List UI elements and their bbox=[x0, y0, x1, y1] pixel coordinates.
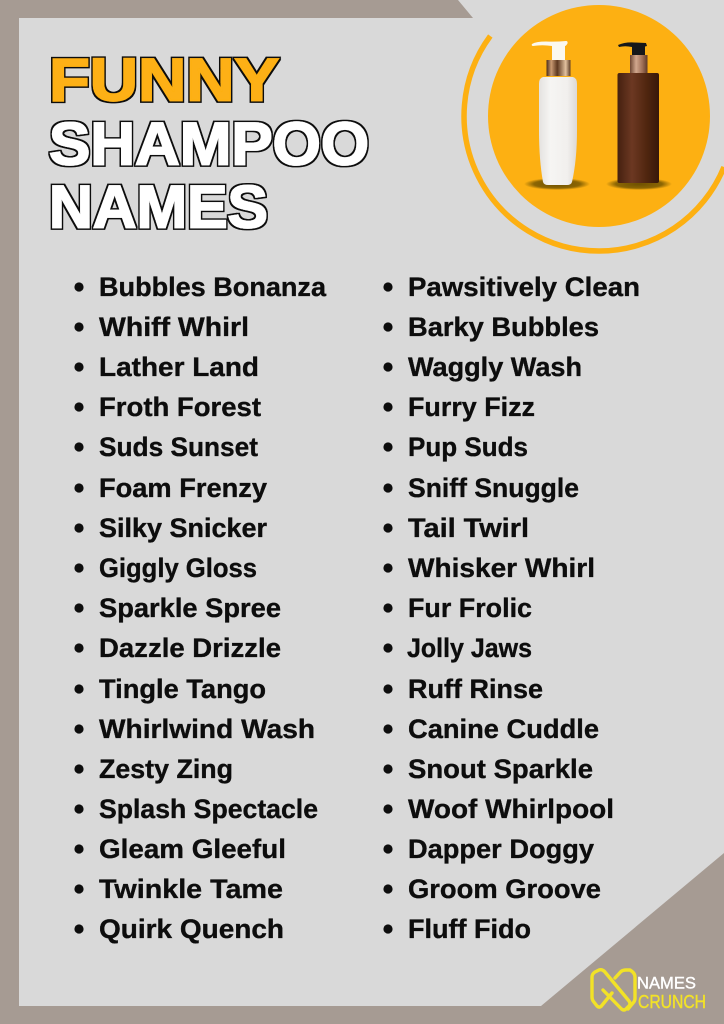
white bottle bbox=[532, 41, 577, 185]
right column names: Dapper Doggy bbox=[408, 834, 594, 864]
left column names: Whiff Whirl bbox=[99, 312, 249, 342]
title line: NAMES: NAMES bbox=[49, 174, 268, 240]
right column names: Tail Twirl bbox=[408, 513, 529, 543]
right column names: Waggly Wash bbox=[408, 352, 582, 382]
left column names: Zesty Zing bbox=[99, 754, 233, 784]
left column names: Quirk Quench bbox=[99, 914, 284, 944]
logo: Names Crunch bbox=[592, 970, 706, 1012]
right column names: Barky Bubbles bbox=[408, 312, 599, 342]
left column names bbox=[99, 272, 327, 944]
left column names: Bubbles Bonanza bbox=[99, 272, 327, 302]
right column names: Pup Suds bbox=[408, 432, 528, 462]
right column names: Fluff Fido bbox=[408, 914, 531, 944]
left column names: Froth Forest bbox=[99, 392, 261, 422]
logo wordmark: NAMES: NAMES bbox=[637, 974, 696, 992]
title line: FUNNY: FUNNY bbox=[49, 46, 279, 114]
left column names: Foam Frenzy bbox=[99, 473, 267, 503]
left column names: Silky Snicker bbox=[99, 513, 267, 543]
right column names: Sniff Snuggle bbox=[408, 473, 579, 503]
left column names: Whirlwind Wash bbox=[99, 714, 315, 744]
logo wordmark: CRUNCH: CRUNCH bbox=[638, 992, 706, 1012]
left column names: Giggly Gloss bbox=[99, 553, 257, 583]
right column names: Jolly Jaws bbox=[407, 633, 532, 663]
left column bullets bbox=[74, 282, 84, 934]
right column names: Groom Groove bbox=[408, 874, 601, 904]
yellow arc ring bbox=[464, 36, 724, 251]
logo icon bbox=[592, 970, 635, 1010]
left column names: Sparkle Spree bbox=[99, 593, 281, 623]
right column names: Snout Sparkle bbox=[408, 754, 593, 784]
title bbox=[49, 46, 369, 240]
right column names: Fur Frolic bbox=[408, 593, 532, 623]
name list: right column bbox=[383, 272, 640, 944]
right column bullets bbox=[383, 282, 393, 934]
right column names: Furry Fizz bbox=[408, 392, 535, 422]
right column names: Pawsitively Clean bbox=[408, 272, 640, 302]
hero illustration: shampoo bottles in circle bbox=[464, 5, 724, 251]
right column names: Woof Whirlpool bbox=[408, 794, 614, 824]
bottle shadows bbox=[524, 178, 672, 190]
name list: left column bbox=[74, 272, 327, 944]
left column names: Gleam Gleeful bbox=[99, 834, 286, 864]
left column names: Tingle Tango bbox=[99, 674, 266, 704]
yellow circle bbox=[488, 5, 710, 227]
left column names: Suds Sunset bbox=[99, 432, 258, 462]
right column names: Whisker Whirl bbox=[408, 553, 595, 583]
left column names: Splash Spectacle bbox=[99, 794, 318, 824]
right column names: Canine Cuddle bbox=[408, 714, 599, 744]
left column names: Dazzle Drizzle bbox=[99, 633, 281, 663]
brown bottle bbox=[618, 42, 659, 183]
right column names bbox=[407, 272, 640, 944]
left column names: Twinkle Tame bbox=[99, 874, 283, 904]
left column names: Lather Land bbox=[99, 352, 259, 382]
right column names: Ruff Rinse bbox=[408, 674, 543, 704]
title line: SHAMPOO: SHAMPOO bbox=[49, 110, 369, 178]
